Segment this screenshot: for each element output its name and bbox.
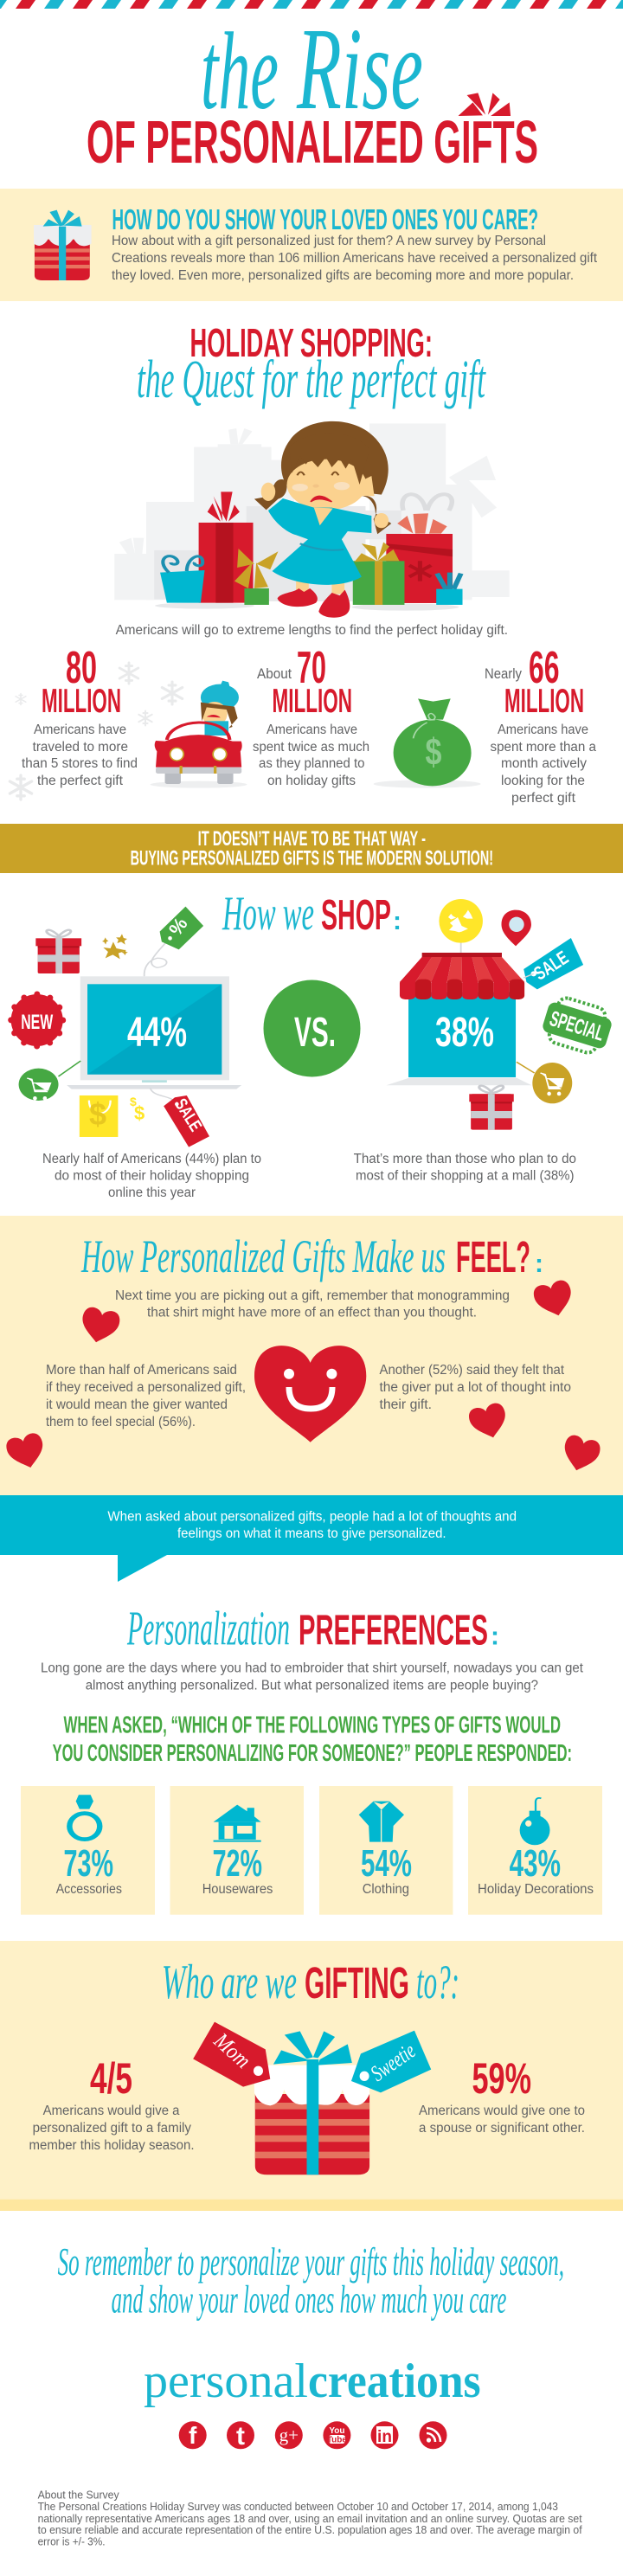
gift xyxy=(469,1086,514,1130)
card: accessories: Accessories xyxy=(56,1882,122,1897)
text: online caption: online this year xyxy=(108,1185,196,1200)
stat: 59 percent xyxy=(419,2054,585,2136)
stat: 66 million: 66 xyxy=(529,643,559,693)
chart: online shopping illustration: $ xyxy=(89,1096,106,1132)
background gift boxes xyxy=(114,423,510,600)
title: the xyxy=(201,10,279,132)
new badge: NEW xyxy=(21,1011,53,1034)
stat: 70 million: About xyxy=(257,665,292,682)
stat: four fifths: Americans would give a xyxy=(43,2104,180,2118)
feel heading: FEEL? xyxy=(456,1232,530,1282)
feel right text: Another (52%) said they felt that xyxy=(379,1363,565,1378)
icon: linkedin xyxy=(370,2421,398,2449)
icon: money bag xyxy=(374,698,481,788)
illustration: girl with gifts xyxy=(114,421,510,618)
icon: stars xyxy=(102,934,128,959)
about the survey: The Personal Creations Holiday Survey was conducted between October 10 and October 17, 2014, among 1,043 xyxy=(38,2500,558,2513)
dress xyxy=(268,498,371,585)
airmail stripe border xyxy=(0,0,623,9)
new badge xyxy=(11,994,63,1046)
stat: 59 percent: a spouse or significant other. xyxy=(419,2121,585,2136)
feel left text: More than half of Americans said xyxy=(46,1363,237,1378)
vs circle: VS. xyxy=(294,1010,336,1056)
text: preferences intro: almost anything personalized. But what personalized items are people buying? xyxy=(86,1679,538,1693)
about the survey xyxy=(38,2489,582,2548)
icon: percent tag xyxy=(145,939,169,976)
stat: four fifths: 4/5 xyxy=(90,2054,132,2103)
closing message xyxy=(58,2239,564,2322)
stat: 70 million: as they planned to xyxy=(259,756,365,771)
stat: 70 million: 70 xyxy=(297,643,326,693)
about the survey: error is +/- 3%. xyxy=(38,2535,106,2548)
logo: creations xyxy=(308,2354,481,2408)
icon: money bag: $ xyxy=(426,731,441,774)
icon: ring xyxy=(69,1795,100,1840)
text: online caption: do most of their holiday shopping xyxy=(55,1169,249,1184)
vs circle xyxy=(263,980,360,1076)
banner: modern solution: IT DOESN’T HAVE TO BE THAT WAY - xyxy=(198,827,426,851)
icon: google plus xyxy=(275,2421,303,2449)
feel intro: Next time you are picking out a gift, remember that monogramming xyxy=(115,1288,510,1303)
callout: speech bubble: When asked about personalized gifts, people had a lot of thoughts and xyxy=(107,1510,517,1525)
card: clothing xyxy=(319,1786,453,1915)
text: online caption: Nearly half of Americans (44%) plan to xyxy=(42,1152,261,1166)
stat: 70 million xyxy=(253,643,369,788)
card: holiday decorations: 43% xyxy=(510,1842,561,1885)
stat: four fifths xyxy=(29,2054,194,2153)
stat: 80 million: MILLION xyxy=(42,683,121,720)
title: Rise xyxy=(296,4,423,134)
card: housewares: 72% xyxy=(213,1842,262,1885)
banner: modern solution xyxy=(0,824,623,873)
icon: youtube: Tube xyxy=(327,2435,347,2445)
chart: mall shopping illustration xyxy=(386,899,615,1130)
panel: feel xyxy=(0,1216,623,1495)
card: holiday decorations xyxy=(468,1786,602,1915)
card: accessories xyxy=(21,1786,155,1915)
card: clothing: Clothing xyxy=(363,1882,409,1897)
heading: holiday shopping xyxy=(137,320,486,409)
feel left text: them to feel special (56%). xyxy=(46,1415,196,1429)
card: housewares xyxy=(170,1786,304,1915)
stat: 80 million: Americans have xyxy=(34,723,126,737)
store xyxy=(408,992,516,1077)
icon: ornament xyxy=(520,1798,550,1845)
girl xyxy=(254,421,391,618)
chart: online shopping illustration: $ xyxy=(134,1102,145,1124)
card: housewares: Housewares xyxy=(202,1882,273,1897)
chart: mall shopping illustration: SALE xyxy=(530,947,572,985)
star balloon xyxy=(459,941,463,954)
icon: twitter xyxy=(227,2421,254,2451)
special badge xyxy=(539,993,615,1057)
stat: 80 million: 80 xyxy=(66,643,97,693)
gold cart xyxy=(517,1062,535,1073)
icon: house xyxy=(214,1805,261,1842)
stat: 66 million: month actively xyxy=(501,756,587,771)
gift: teal cup xyxy=(160,556,204,603)
text: mall caption: most of their shopping at a mall (38%) xyxy=(356,1169,575,1184)
decorative hearts xyxy=(4,1278,602,1475)
tag: mom xyxy=(193,2022,270,2087)
text: preferences intro: Long gone are the days where you had to embroider that shirt yourself, nowadays you can get xyxy=(41,1661,584,1676)
title xyxy=(87,4,538,176)
callout: speech bubble xyxy=(0,1495,623,1582)
illustration: gift with tags xyxy=(193,2022,431,2175)
icon: facebook xyxy=(179,2421,207,2449)
logo xyxy=(144,2354,481,2408)
question heading xyxy=(53,1712,572,1766)
feel heading: : xyxy=(535,1249,543,1278)
callout: speech bubble: feelings on what it means to give personalized. xyxy=(177,1526,446,1541)
feel right text: the giver put a lot of thought into xyxy=(379,1380,571,1395)
stat: 80 million xyxy=(22,643,138,788)
logo: personal xyxy=(144,2354,308,2408)
red sale tag xyxy=(151,1088,177,1103)
icon: rss xyxy=(419,2421,446,2449)
gift: red large xyxy=(386,513,453,603)
stat: 59 percent: Americans would give one to xyxy=(419,2104,585,2118)
heading: how we shop: SHOP xyxy=(321,892,391,939)
stat: 59 percent: 59% xyxy=(472,2054,531,2103)
feel left text xyxy=(46,1363,246,1429)
icon: linkedin: in xyxy=(377,2428,392,2446)
intro text: How about with a gift personalized just for them? A new survey by Personal xyxy=(112,234,546,248)
heading: preferences: : xyxy=(491,1622,499,1651)
heading: preferences: PREFERENCES xyxy=(299,1608,488,1654)
feel intro xyxy=(115,1288,510,1320)
about the survey: nationally representative Americans ages 18 and over, using an email invitation and an online survey. Quotas are set xyxy=(38,2512,582,2525)
icon: shirt xyxy=(359,1802,404,1842)
gift: green small xyxy=(234,549,278,605)
text: mall caption xyxy=(354,1152,576,1184)
card: accessories: 73% xyxy=(64,1842,113,1885)
feel left text: it would mean the giver wanted xyxy=(46,1397,228,1412)
feel right text: their gift. xyxy=(379,1397,432,1412)
panel: gifting xyxy=(0,1941,623,2211)
gifting heading: to?: xyxy=(416,1956,459,2009)
icon: youtube xyxy=(323,2421,350,2449)
stat: 66 million: perfect gift xyxy=(511,791,576,806)
gift: red tall xyxy=(199,491,254,603)
stat: 80 million: the perfect gift xyxy=(37,774,124,788)
feel right text xyxy=(379,1363,571,1412)
heading: how we shop: How we xyxy=(222,887,314,941)
heading: how we shop: : xyxy=(393,907,401,935)
stat: four fifths: personalized gift to a family xyxy=(33,2121,191,2136)
icon: google plus: g+ xyxy=(279,2425,299,2445)
heading: holiday shopping: HOLIDAY SHOPPING: xyxy=(190,320,433,365)
icon: smiling heart xyxy=(254,1346,366,1442)
stat: 66 million: Americans have xyxy=(498,723,588,737)
gift: green large xyxy=(353,543,404,605)
stat: 66 million: spent more than a xyxy=(490,740,596,755)
chart: online shopping illustration: $ xyxy=(130,1095,137,1108)
heading: preferences: Personalization xyxy=(126,1603,290,1656)
intro text xyxy=(112,234,598,283)
icon: girl in car xyxy=(151,681,247,788)
panel: intro xyxy=(0,189,623,301)
stat: 70 million: Americans have xyxy=(267,723,357,737)
icon: gift xyxy=(34,210,92,280)
feel intro: that shirt might have more of an effect than you thought. xyxy=(147,1306,477,1320)
chart: online shopping illustration: % xyxy=(164,914,192,940)
icon: facebook: f xyxy=(189,2422,197,2449)
tag: sweetie xyxy=(351,2031,431,2092)
feel left text: if they received a personalized gift, xyxy=(46,1380,246,1395)
stat: 66 million: looking for the xyxy=(501,774,585,788)
stat: 66 million xyxy=(485,643,596,806)
text: extreme lengths: Americans will go to extreme lengths to find the perfect holiday gift. xyxy=(116,623,508,638)
gifting heading: Who are we xyxy=(162,1956,297,2009)
38 percent: 38% xyxy=(435,1010,494,1056)
green cart badge xyxy=(59,1061,80,1076)
gift: teal small xyxy=(436,573,463,605)
intro text: they loved. Even more, personalized gifts are becoming more and more popular. xyxy=(112,268,574,283)
stat: 80 million: traveled to more xyxy=(33,740,128,755)
stat: 70 million: spent twice as much xyxy=(253,740,369,755)
stat: 66 million: Nearly xyxy=(485,665,522,682)
gifting heading: GIFTING xyxy=(305,1958,409,2007)
text: mall caption: That’s more than those who plan to do xyxy=(354,1152,576,1166)
about the survey: to ensure reliable and accurate representation of the entire U.S. population ages 18 and over. The average margin of xyxy=(38,2523,582,2536)
illustration: gift with tags: Sweetie xyxy=(366,2038,420,2086)
44 percent: 44% xyxy=(127,1010,187,1056)
stat: 80 million: than 5 stores to find xyxy=(22,756,138,771)
social icons xyxy=(179,2421,446,2451)
stat: 70 million: MILLION xyxy=(272,683,352,720)
intro text: Creations reveals more than 106 million Americans have received a personalized gift xyxy=(112,251,598,266)
pin xyxy=(502,910,531,946)
shopping bag xyxy=(80,1095,118,1137)
icon: twitter: t xyxy=(236,2422,245,2451)
stat: 70 million: on holiday gifts xyxy=(267,774,356,788)
chart: online shopping illustration xyxy=(11,907,241,1147)
laptop xyxy=(80,976,229,1080)
decorative snowflakes xyxy=(10,663,183,800)
text: preferences intro xyxy=(41,1661,584,1693)
card: holiday decorations: Holiday Decorations xyxy=(478,1882,594,1897)
icon: youtube: You xyxy=(329,2426,344,2436)
illustration: gift with tags: Mom xyxy=(209,2027,255,2073)
chart: online shopping illustration: SALE xyxy=(170,1095,205,1135)
legs and shoes xyxy=(296,580,309,594)
text: online caption xyxy=(42,1152,261,1200)
blue sale tag xyxy=(523,938,583,989)
about the survey: About the Survey xyxy=(38,2489,119,2502)
braids xyxy=(254,479,287,510)
card: clothing: 54% xyxy=(361,1842,412,1885)
icon: gift xyxy=(35,930,81,973)
stat: four fifths: member this holiday season. xyxy=(29,2138,194,2153)
